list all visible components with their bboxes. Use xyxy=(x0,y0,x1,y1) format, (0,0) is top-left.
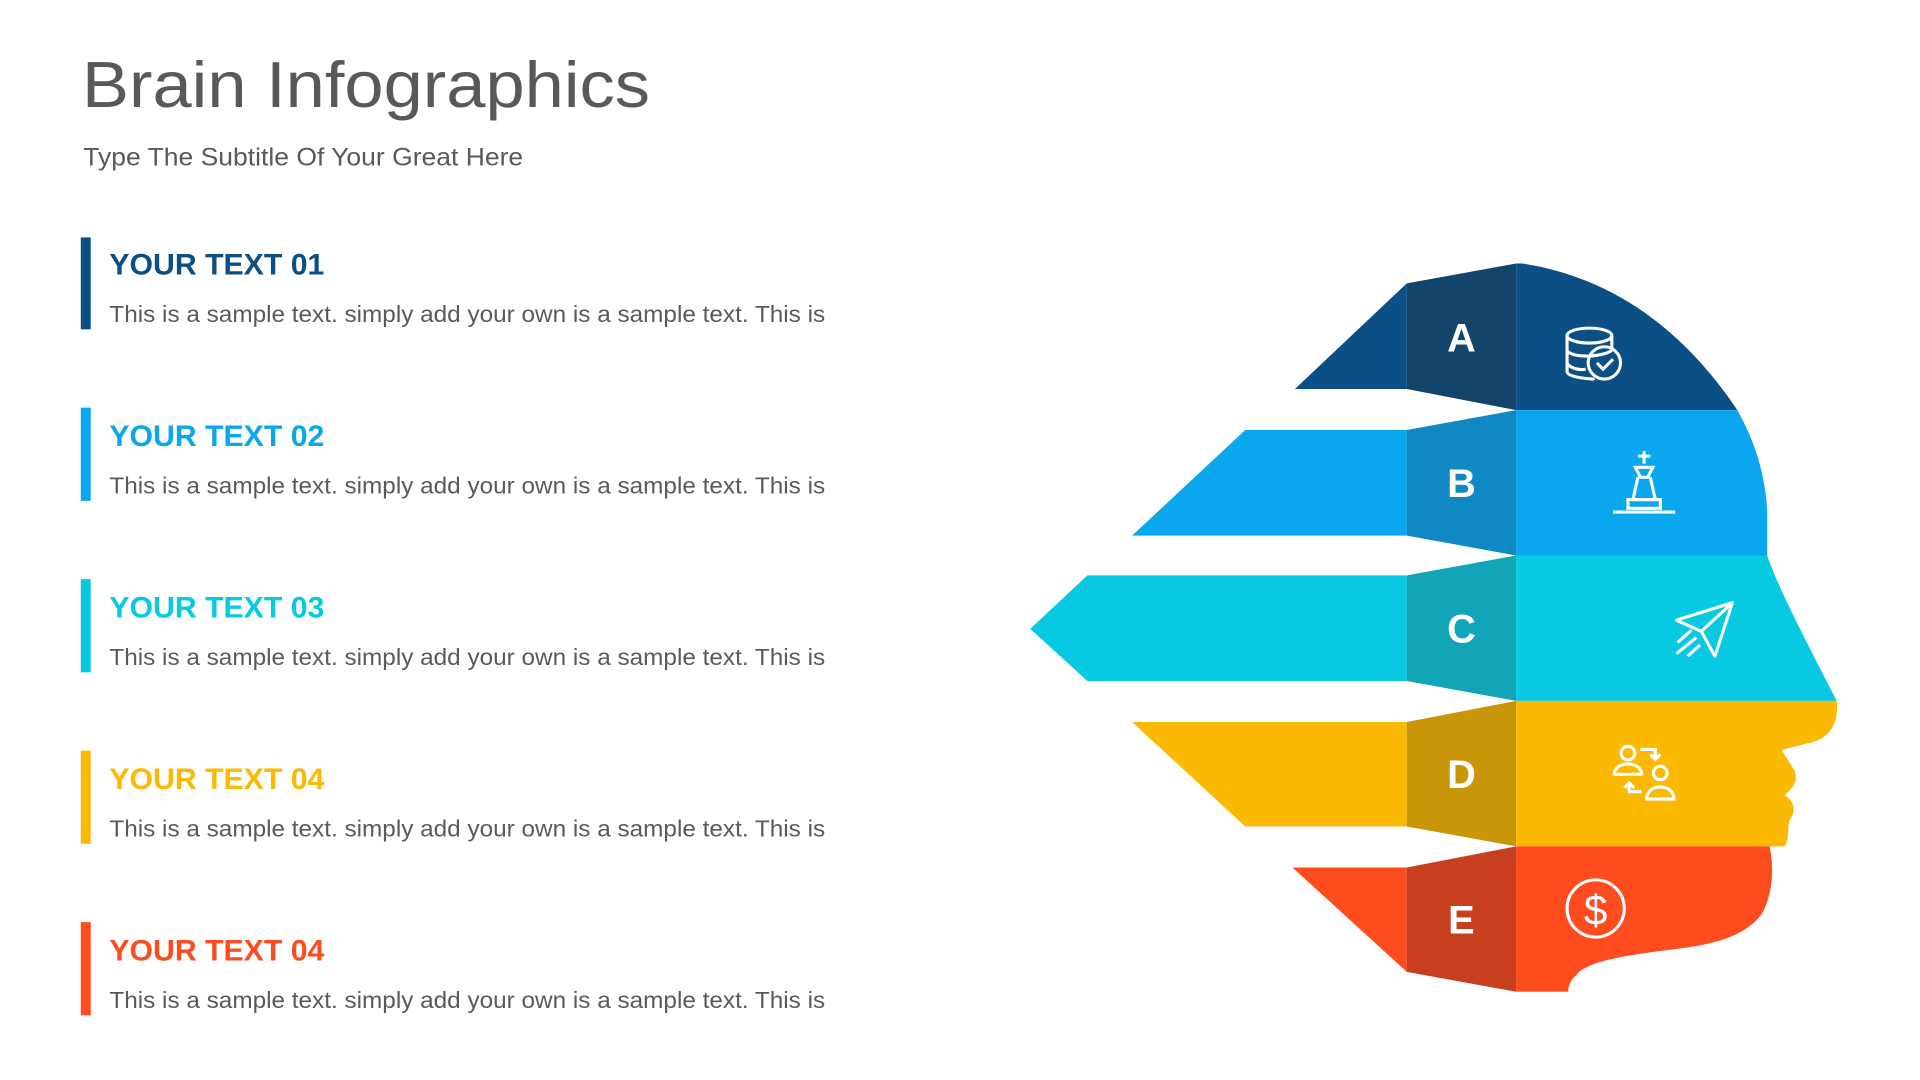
item 05 xyxy=(81,922,825,1015)
item 04: YOUR TEXT 04 xyxy=(109,763,325,796)
item 03 xyxy=(81,579,825,672)
head diagram xyxy=(1030,263,1837,992)
icon: dollar coin: $ xyxy=(1584,887,1607,934)
item 03: YOUR TEXT 03 xyxy=(109,592,324,625)
band C xyxy=(1030,556,1837,701)
item 01 xyxy=(81,237,825,329)
item 02 xyxy=(81,408,825,501)
item 05: YOUR TEXT 04 xyxy=(109,935,325,968)
item 01: This is a sample text. simply add your own is a sample text. This is xyxy=(109,301,825,327)
title: Brain Infographics xyxy=(82,49,650,121)
band C: C xyxy=(1447,608,1476,652)
icon: dollar coin xyxy=(1567,880,1624,937)
band B xyxy=(1132,410,1767,556)
band E xyxy=(1292,846,1772,992)
icon: chess king xyxy=(1613,451,1675,512)
item 02: This is a sample text. simply add your own is a sample text. This is xyxy=(109,472,825,498)
band A: A xyxy=(1447,317,1476,361)
icon: paper plane xyxy=(1676,603,1732,656)
item 03: This is a sample text. simply add your own is a sample text. This is xyxy=(109,644,825,670)
icon: database check xyxy=(1567,328,1621,379)
item 02: YOUR TEXT 02 xyxy=(109,420,324,453)
band A xyxy=(1295,263,1737,410)
band D: D xyxy=(1447,753,1476,797)
item 05: This is a sample text. simply add your own is a sample text. This is xyxy=(109,987,825,1013)
icon: people exchange xyxy=(1614,746,1674,799)
item 01: YOUR TEXT 01 xyxy=(109,249,324,282)
item 04: This is a sample text. simply add your own is a sample text. This is xyxy=(109,815,825,841)
subtitle: Type The Subtitle Of Your Great Here xyxy=(83,144,523,171)
band E: E xyxy=(1448,898,1475,942)
band B: B xyxy=(1447,462,1476,506)
band D xyxy=(1132,701,1837,846)
item 04 xyxy=(81,751,825,844)
